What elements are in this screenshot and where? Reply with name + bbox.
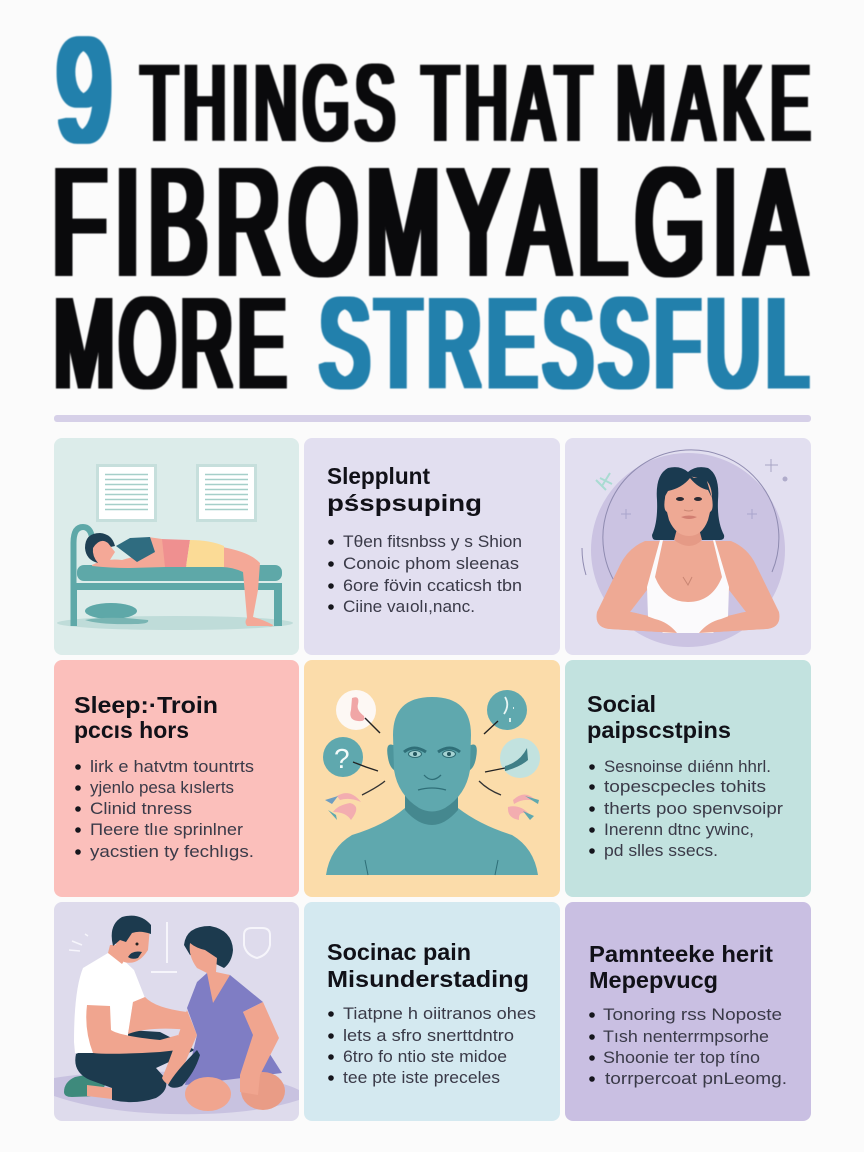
heading: Sleep:·Troin: [74, 692, 218, 718]
slippers under bed: [85, 603, 148, 624]
heading: Misunderstading: [327, 966, 529, 992]
title: THINGS: [141, 43, 395, 164]
heading: [327, 939, 529, 992]
heading: [587, 691, 731, 743]
panel: purple text card: [565, 902, 811, 1121]
heading: Socinac pain: [327, 939, 471, 965]
title: MORE: [54, 272, 286, 414]
bullet list: [328, 533, 522, 616]
bullet list: torrpercoat pnLeomg.: [605, 1070, 787, 1088]
icon: left nerve shapes: [325, 793, 361, 820]
title: STRESSFUL: [320, 272, 807, 414]
bullet list: [589, 758, 784, 860]
icon: pain bubble top left: [336, 690, 380, 733]
icon: question bubble: [323, 737, 378, 777]
bullet list: lets a sfro snerttdntro: [343, 1027, 514, 1045]
bullet list: tee pte iste preceles: [343, 1069, 500, 1087]
decorative marks: [69, 922, 270, 972]
bullet list: Tθen fitsnbss y s Shion: [343, 533, 522, 551]
panel: sleeping illustration: [54, 438, 299, 655]
title: [52, 7, 810, 414]
heading: pccıs hors: [74, 717, 189, 743]
panel: sleep text card: [304, 438, 560, 655]
bullet list: yjenlo pesa kıslerts: [90, 779, 234, 797]
panel: misunderstanding text card: [304, 902, 560, 1121]
icon: right nerve shapes: [508, 794, 539, 820]
bullet list: Clinid tnress: [90, 800, 192, 818]
bullet list: Tısh nenterrmpsorhe: [603, 1028, 769, 1046]
bullet list: Tiatpne h oiitranos ohes: [343, 1005, 536, 1023]
bed: [71, 527, 282, 626]
heading: Pamnteeke herit: [589, 941, 773, 967]
icon: left window: [96, 464, 157, 522]
bullet list: [589, 1006, 787, 1088]
woman: [162, 926, 285, 1111]
pain lines: [362, 781, 501, 795]
bullet list: topescpecles tohits: [604, 778, 766, 796]
bullet list: yacstien ty fechlıgs.: [90, 843, 254, 861]
heading: [74, 692, 218, 743]
bullet list: [75, 758, 254, 861]
heading: pśspsuping: [327, 490, 482, 516]
heading: [589, 941, 773, 993]
bullet list: pd slles ssecs.: [604, 842, 718, 860]
title: FIBROMYALGIA: [52, 137, 805, 308]
panel: care illustration: [54, 902, 299, 1121]
heading: [327, 463, 482, 516]
head and shoulders: [326, 697, 538, 875]
bullet list: Ciine vaıolı,nanc.: [343, 598, 475, 616]
title: 9: [57, 7, 111, 173]
floor shadow: [54, 1072, 299, 1114]
panel: social text card: [565, 660, 811, 897]
bullet list: Tonoring rss Noposte: [603, 1006, 782, 1024]
bullet list: [328, 1005, 536, 1087]
title: THAT: [422, 43, 592, 164]
bullet list: Shoonie ter top tíno: [603, 1049, 760, 1067]
title: MAKE: [616, 43, 810, 164]
bullet list: Inerenn dtnc ywinc,: [604, 821, 754, 839]
bullet list: Sesnoinse dıiénn hhrl.: [604, 758, 771, 776]
panel: woman illustration: [565, 438, 811, 655]
bullet list: therts poo spenvsoipr: [604, 800, 784, 818]
bullet list: Πeere tlıe sprinlner: [90, 821, 244, 839]
bullet list: 6tro fo ntio ste midoe: [343, 1048, 507, 1066]
icon: bubble top right: [484, 690, 527, 734]
icon: question bubble: ?: [334, 743, 350, 774]
heading: Mepepvucg: [589, 967, 718, 993]
sleeping person: [85, 533, 273, 626]
heading: paipscstpins: [587, 717, 731, 743]
heading: Slepplunt: [327, 463, 430, 489]
woman figure: [597, 467, 779, 633]
bullet list: lirk e hatvtm tountrts: [90, 758, 254, 776]
man: [64, 916, 195, 1102]
background circle: [582, 450, 785, 647]
sparkles: [596, 459, 788, 519]
icon: right window: [196, 464, 257, 522]
panel: sleep-train text card: [54, 660, 299, 897]
heading: Social: [587, 691, 656, 717]
panel: head illustration: [304, 660, 560, 897]
floor shadow: [57, 616, 293, 630]
icon: light bubble: [485, 738, 540, 778]
bullet list: Conoic phom sleenas: [343, 555, 519, 573]
bullet list: 6ore fövin ccaticsh tbn: [343, 577, 522, 595]
